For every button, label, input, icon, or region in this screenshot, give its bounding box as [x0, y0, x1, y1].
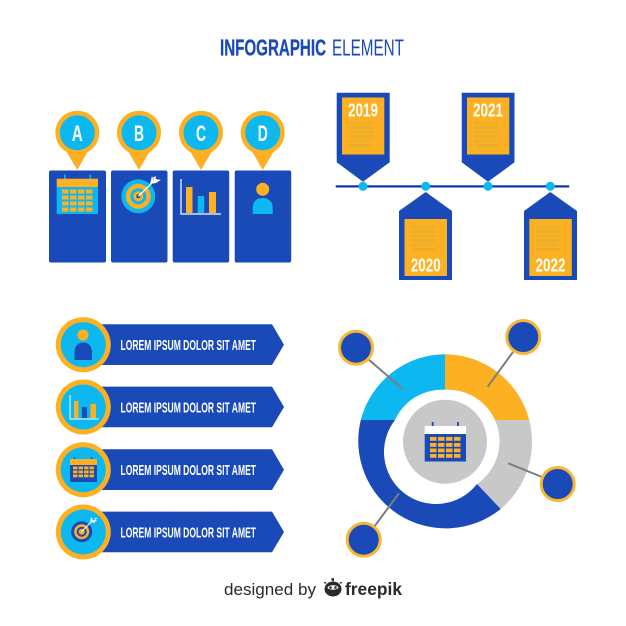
icon: bar chart	[181, 179, 221, 214]
icon: calendar	[70, 457, 97, 482]
row 2	[56, 380, 284, 434]
icon: calendar	[425, 422, 466, 462]
title: ELEMENT	[332, 34, 404, 60]
marker: 2020: 2020	[411, 254, 441, 276]
node: top left	[340, 331, 372, 364]
marker: 2021: 2021	[473, 100, 503, 121]
marker: 2020	[399, 192, 452, 280]
row 2: LOREM IPSUM DOLOR SIT AMET	[120, 399, 256, 416]
marker: 2022: 2022	[536, 254, 566, 276]
timeline axis	[336, 185, 569, 188]
card A	[49, 111, 106, 262]
panel: timeline	[336, 93, 577, 280]
icon: person	[253, 183, 273, 214]
panel: donut chart	[340, 320, 574, 556]
row 1	[56, 317, 284, 372]
card D: D	[258, 121, 268, 146]
footer credit	[224, 578, 402, 599]
connector lines	[368, 352, 542, 527]
card B: B	[134, 121, 144, 146]
icon: bar chart	[70, 395, 99, 419]
card A: A	[72, 121, 83, 146]
centre disc	[403, 400, 487, 484]
footer credit: freepik	[345, 579, 402, 599]
title: INFOGRAPHIC	[220, 34, 326, 60]
segment: yellow	[445, 354, 529, 420]
row 4	[56, 504, 284, 560]
marker: 2019: 2019	[348, 100, 378, 121]
card C	[173, 111, 229, 262]
marker: 2022	[524, 192, 577, 280]
icon: person	[74, 330, 92, 360]
card D	[235, 111, 291, 262]
segment: cyan	[361, 354, 445, 420]
row 1: LOREM IPSUM DOLOR SIT AMET	[120, 337, 256, 354]
marker: 2019	[337, 93, 390, 182]
card B	[111, 111, 168, 262]
row 3	[56, 442, 284, 497]
node: right	[541, 468, 574, 500]
segment: gray	[477, 420, 532, 509]
node: top right	[507, 320, 540, 354]
footer credit: designed by	[224, 580, 316, 599]
icon: target	[71, 516, 98, 542]
panel: ABCD cards	[49, 111, 291, 262]
card C: C	[196, 121, 206, 146]
node: bottom left	[347, 523, 380, 556]
icon: target	[121, 176, 161, 213]
row 3: LOREM IPSUM DOLOR SIT AMET	[120, 462, 256, 479]
icon: calendar	[57, 174, 98, 214]
panel: list rows	[56, 317, 284, 560]
segment: blue	[358, 420, 501, 528]
icon: freepik bee	[324, 578, 342, 596]
timeline dots	[358, 182, 555, 191]
row 4: LOREM IPSUM DOLOR SIT AMET	[120, 524, 256, 541]
marker: 2021	[462, 93, 514, 182]
